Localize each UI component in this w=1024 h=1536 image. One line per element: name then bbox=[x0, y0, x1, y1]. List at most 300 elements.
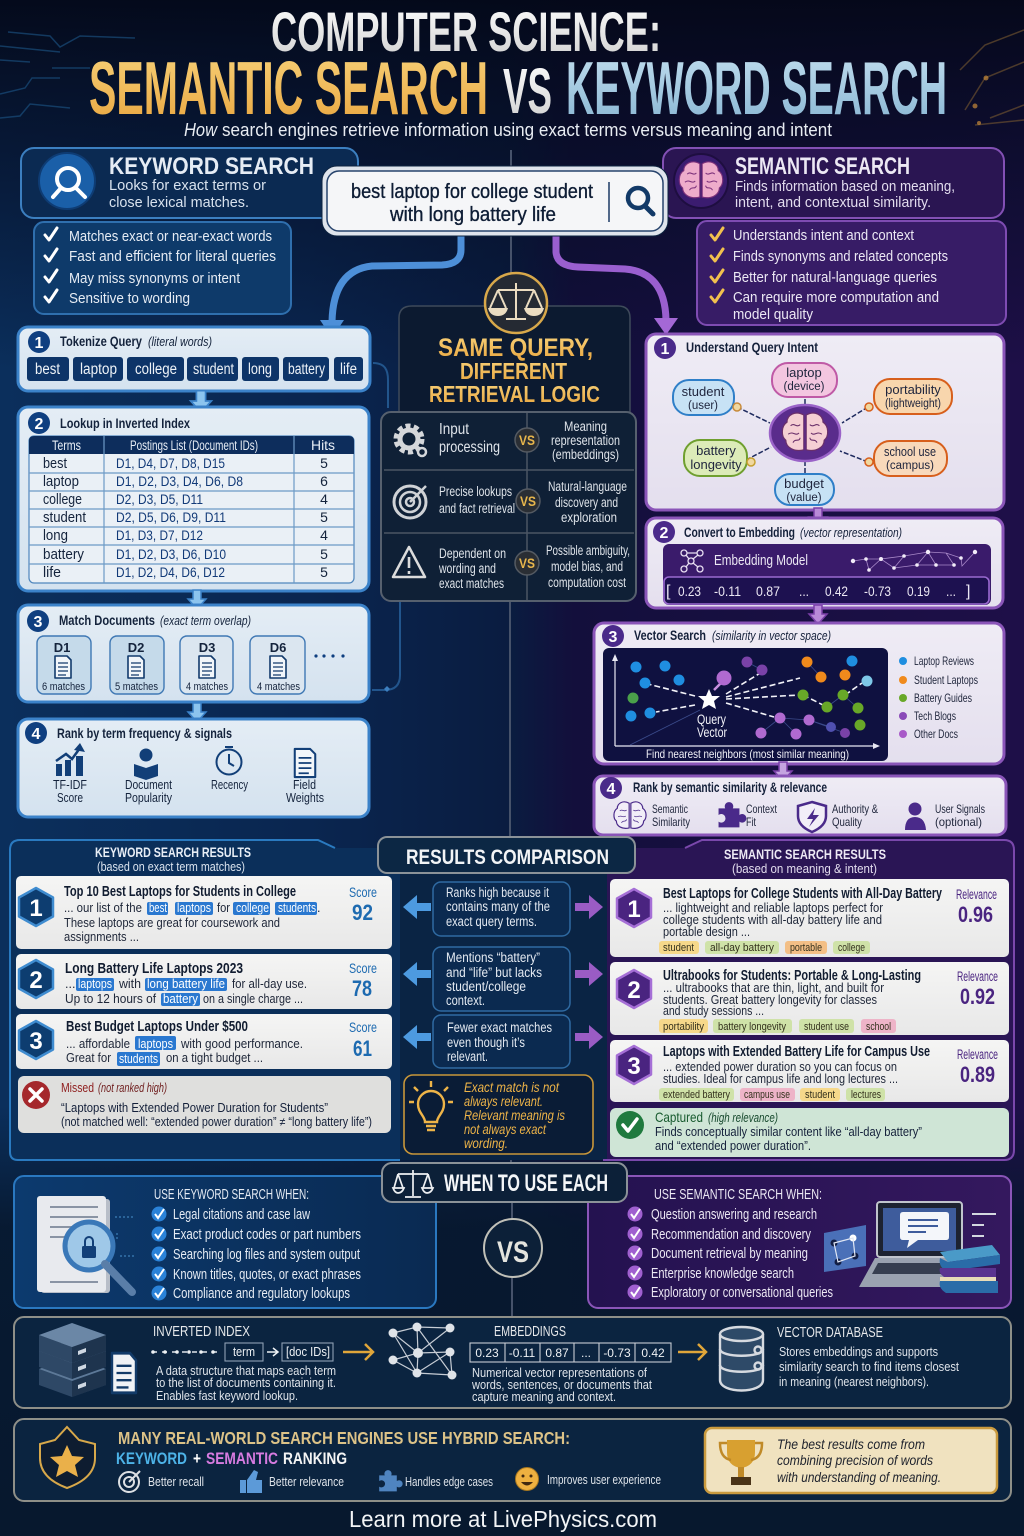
panel: concept definitions: Numerical vector representations of bbox=[472, 1366, 647, 1380]
embedding cells: 0.23 bbox=[475, 1346, 499, 1360]
result card 2: with bbox=[118, 977, 141, 991]
result card 3: on a tight budget ... bbox=[166, 1051, 263, 1065]
query star bbox=[698, 689, 720, 709]
panel: semantic search results: (based on meaning & intent) bbox=[732, 861, 877, 876]
panel: keyword features bbox=[34, 222, 291, 314]
panel: rank by semantic similarity: Semantic bbox=[652, 802, 688, 816]
panel: use keyword search when bbox=[14, 1176, 436, 1308]
subtitle: search engines retrieve information using exact terms versus meaning and intent bbox=[222, 120, 832, 140]
document cards: 4 matches bbox=[186, 681, 228, 693]
result card 2: laptops bbox=[78, 977, 112, 991]
semantic result card 3 bbox=[610, 1040, 1009, 1102]
panel: concept definitions: to the list of documents containing it. bbox=[156, 1376, 336, 1390]
panel: rank by semantic similarity: Quality bbox=[832, 815, 862, 829]
panel: rank by term frequency: TF-IDF bbox=[53, 778, 87, 792]
panel: rank by semantic similarity: Similarity bbox=[652, 815, 690, 829]
panel: semantic features: Understands intent and context bbox=[733, 227, 915, 244]
panel: keyword features: Fast and efficient for literal queries bbox=[69, 248, 276, 265]
index table: 5 bbox=[320, 455, 328, 471]
panel: rank by term frequency: Weights bbox=[286, 791, 324, 805]
panel: rank by semantic similarity bbox=[594, 776, 1006, 835]
query tokens: best bbox=[35, 361, 61, 378]
semantic result card 3: ... extended power duration so you can focus on bbox=[663, 1060, 897, 1074]
vector space plot: Vector bbox=[697, 725, 727, 740]
index table: battery bbox=[43, 547, 85, 563]
term to doc ids diagram: term bbox=[233, 1345, 255, 1359]
icon: document popularity bbox=[134, 748, 158, 780]
arrow bbox=[809, 605, 827, 624]
keyword use cases: Known titles, quotes, or exact phrases bbox=[173, 1266, 361, 1283]
index table: 4 bbox=[320, 491, 328, 507]
vs badge bbox=[484, 1219, 542, 1277]
arrow bbox=[678, 1344, 706, 1360]
panel: rank by term frequency: Rank by term frequency & signals bbox=[57, 725, 232, 741]
panel: comparison table: and fact retrieval bbox=[439, 501, 515, 516]
panel: concept definitions: similarity search to find items closest bbox=[779, 1359, 959, 1374]
embedding vector: ... bbox=[799, 583, 809, 599]
embedding vector: -0.73 bbox=[864, 583, 891, 599]
icon: vector database bbox=[720, 1327, 763, 1390]
embedding cells bbox=[470, 1343, 671, 1362]
keyword use cases: Searching log files and system output bbox=[173, 1246, 361, 1263]
panel: keyword search results: (based on exact term matches) bbox=[97, 859, 245, 874]
index table: 5 bbox=[320, 509, 328, 525]
callout: exact match: always relevant. bbox=[464, 1093, 543, 1109]
document cards: D1 bbox=[54, 640, 70, 655]
panel: hybrid search bbox=[14, 1419, 1011, 1532]
legend: Tech Blogs bbox=[914, 709, 956, 723]
index table: life bbox=[43, 565, 61, 581]
panel: concept definitions: EMBEDDINGS bbox=[494, 1324, 566, 1340]
panel: lookup in inverted index: Lookup in Inverted Index bbox=[60, 415, 190, 431]
comparison explanations: Mentions “battery” bbox=[446, 950, 540, 965]
icon: tf-idf chart bbox=[56, 743, 85, 776]
semantic result card 3: campus use bbox=[744, 1089, 790, 1101]
vector space plot: Find nearest neighbors (most similar meaning) bbox=[646, 747, 849, 761]
panel: keyword search header: KEYWORD SEARCH bbox=[109, 153, 314, 180]
index table: long bbox=[43, 528, 68, 544]
semantic result card 1: college students with all-day battery life and bbox=[663, 913, 882, 927]
concept bubbles: (campus) bbox=[886, 460, 934, 472]
missed result: (not matched well: “extended power duration” ≠ “long battery life”) bbox=[61, 1115, 372, 1129]
term to doc ids diagram bbox=[151, 1343, 333, 1361]
panel: convert to embedding bbox=[646, 518, 1003, 608]
result card 3: Best Budget Laptops Under $500 bbox=[66, 1019, 248, 1035]
vs badges: VS bbox=[519, 555, 535, 571]
concept bubbles: (value) bbox=[786, 492, 822, 504]
semantic result card 1: 0.96 bbox=[958, 902, 993, 927]
title: COMPUTER SCIENCE: bbox=[271, 0, 661, 63]
panel: use keyword search when: USE KEYWORD SEARCH WHEN: bbox=[154, 1187, 309, 1203]
concept bubbles bbox=[673, 363, 952, 505]
semantic use cases bbox=[628, 1206, 833, 1301]
result card 1: students bbox=[278, 901, 316, 915]
index table: Postings List (Document IDs) bbox=[130, 438, 258, 453]
panel: understand query intent: Understand Query Intent bbox=[686, 339, 818, 355]
panel: comparison table bbox=[381, 412, 636, 601]
result card 2: 78 bbox=[352, 976, 372, 1001]
query tokens bbox=[27, 357, 363, 381]
panel: lookup in inverted index bbox=[18, 407, 369, 591]
results comparison heading bbox=[378, 837, 635, 873]
panel: semantic search header bbox=[663, 148, 1004, 218]
result card 1: 92 bbox=[352, 900, 373, 925]
index table: 5 bbox=[320, 546, 328, 562]
arrow bbox=[343, 1344, 373, 1360]
semantic use cases: Exploratory or conversational queries bbox=[651, 1284, 833, 1301]
index table: D1, D2, D3, D6, D10 bbox=[116, 547, 226, 562]
vector space plot: Query bbox=[697, 712, 726, 727]
panel: rank by semantic similarity: User Signals bbox=[935, 802, 985, 816]
panel: understand query intent bbox=[646, 334, 1004, 510]
panel: rank by semantic similarity: Rank by semantic similarity & relevance bbox=[633, 779, 827, 795]
benefits row bbox=[119, 1468, 661, 1493]
icon: shield star bbox=[40, 1427, 95, 1488]
icon: server stack bbox=[39, 1323, 136, 1397]
concept bubbles: (user) bbox=[688, 400, 718, 412]
embedding vector: 0.87 bbox=[756, 583, 780, 599]
embedding model bar: Embedding Model bbox=[714, 553, 808, 569]
semantic result card 3: extended battery bbox=[663, 1089, 730, 1101]
panel: keyword features: Matches exact or near-exact words bbox=[69, 228, 272, 245]
benefits row: Better recall bbox=[148, 1474, 204, 1489]
panel: comparison table: processing bbox=[439, 439, 500, 456]
query tokens: battery bbox=[288, 361, 325, 378]
icon: neural network bbox=[388, 1322, 456, 1380]
panel: keyword search header: Looks for exact terms or bbox=[109, 177, 266, 194]
index table: 5 bbox=[320, 564, 328, 580]
semantic result card 3: studies. Ideal for campus life and long lectures ... bbox=[663, 1072, 898, 1086]
index table: student bbox=[43, 510, 86, 526]
panel: comparison table: wording and bbox=[438, 561, 496, 576]
icon: user bbox=[905, 802, 926, 830]
panel: match documents bbox=[18, 605, 369, 702]
icon: target bbox=[394, 486, 426, 518]
result card 1: laptops bbox=[177, 901, 211, 915]
subtitle: How bbox=[184, 120, 218, 140]
panel: comparison table: computation cost bbox=[548, 575, 626, 590]
comparison explanations: student/college bbox=[446, 979, 526, 994]
index table: best bbox=[43, 456, 67, 472]
result card 1: for bbox=[217, 901, 230, 915]
legend: Other Docs bbox=[914, 727, 958, 741]
panel: concept definitions: A data structure that maps each term bbox=[156, 1364, 336, 1378]
arrow bbox=[774, 762, 792, 781]
panel: hybrid search: MANY REAL-WORLD SEARCH ENGINES USE HYBRID SEARCH: bbox=[118, 1428, 570, 1448]
document cards: 5 matches bbox=[115, 681, 158, 693]
result card 3: Score bbox=[349, 1019, 377, 1035]
semantic use cases: Document retrieval by meaning bbox=[651, 1245, 808, 1262]
result card 3: 61 bbox=[353, 1036, 372, 1061]
illustration: laptop and books bbox=[824, 1202, 1000, 1293]
benefits row: Improves user experience bbox=[547, 1472, 661, 1487]
panel: concept definitions: Stores embeddings and supports bbox=[779, 1344, 938, 1359]
arrow bbox=[188, 590, 206, 609]
callout: exact match: wording. bbox=[464, 1135, 508, 1151]
panel: keyword search results: KEYWORD SEARCH RESULTS bbox=[95, 844, 251, 860]
icon: recency clock bbox=[216, 747, 242, 774]
semantic result card 3: Laptops with Extended Battery Life for Campus Use bbox=[663, 1044, 930, 1060]
icon: magnifier bbox=[39, 153, 95, 209]
panel: convert to embedding: 2 bbox=[660, 525, 669, 542]
legend: Laptop Reviews bbox=[914, 654, 974, 668]
semantic result card 2: Relevance bbox=[957, 969, 998, 984]
arrow bbox=[191, 391, 211, 412]
missed result: (not ranked high) bbox=[98, 1081, 167, 1095]
callout: exact match: Exact match is not bbox=[464, 1079, 560, 1095]
hybrid formula: + bbox=[193, 1450, 201, 1468]
index table: D2, D3, D5, D11 bbox=[116, 492, 203, 507]
panel: same query different retrieval logic bbox=[399, 273, 630, 412]
panel: tokenize query bbox=[18, 327, 370, 391]
panel: keyword features: Sensitive to wording bbox=[69, 290, 190, 307]
embedding cells: ... bbox=[581, 1346, 591, 1360]
panel: comparison table: Input bbox=[439, 421, 469, 438]
search box bbox=[322, 166, 668, 236]
panel: rank by semantic similarity: Context bbox=[746, 802, 777, 816]
embedding model bar bbox=[663, 544, 991, 605]
keyword use cases bbox=[152, 1206, 361, 1302]
panel: use semantic search when bbox=[588, 1176, 1011, 1308]
search box: with long battery life bbox=[389, 204, 556, 226]
arrow bbox=[188, 703, 206, 722]
result card 2: battery bbox=[163, 992, 199, 1006]
panel: comparison table: Dependent on bbox=[439, 546, 506, 561]
embedding vector: [ bbox=[666, 583, 671, 600]
semantic result card 1: all-day battery bbox=[710, 942, 774, 954]
when to use each heading: WHEN TO USE EACH bbox=[444, 1170, 608, 1197]
result card 3: students bbox=[119, 1052, 158, 1066]
panel: comparison table: Possible ambiguity, bbox=[546, 543, 630, 558]
icon: warning bbox=[393, 547, 425, 577]
semantic result card 2: student use bbox=[804, 1021, 849, 1033]
document cards: 4 matches bbox=[257, 681, 300, 693]
panel: tokenize query: (literal words) bbox=[148, 334, 212, 349]
query tokens: long bbox=[248, 361, 272, 378]
panel: semantic search header: SEMANTIC SEARCH bbox=[735, 153, 910, 180]
result card 2: on a single charge ... bbox=[203, 992, 303, 1006]
query tokens: college bbox=[135, 361, 177, 378]
arrow: query to semantic bbox=[556, 236, 678, 335]
result card 3: Great for bbox=[66, 1051, 111, 1065]
document cards: D3 bbox=[199, 640, 215, 655]
panel: semantic features: Can require more computation and bbox=[733, 289, 939, 306]
captured result: (high relevance) bbox=[708, 1111, 778, 1125]
hybrid formula bbox=[116, 1450, 347, 1468]
result card 2: 2 bbox=[29, 967, 43, 994]
vs badges bbox=[515, 428, 540, 575]
result card 2: for all-day use. bbox=[232, 977, 307, 991]
result card 2: Score bbox=[349, 960, 377, 976]
result card 1: Score bbox=[349, 884, 377, 900]
comparison explanations: Fewer exact matches bbox=[447, 1020, 552, 1035]
result card 1 bbox=[16, 876, 392, 949]
result card 1: college bbox=[236, 901, 269, 915]
semantic result card 1 bbox=[610, 879, 1009, 957]
result card 3 bbox=[16, 1014, 392, 1069]
panel: match documents: (exact term overlap) bbox=[160, 613, 251, 628]
panel: tokenize query: 1 bbox=[35, 335, 44, 352]
semantic result card 1: student bbox=[663, 942, 694, 954]
concept bubbles: battery bbox=[696, 443, 736, 458]
semantic result card 2: battery longevity bbox=[718, 1021, 786, 1033]
comparison explanations: Ranks high because it bbox=[446, 885, 549, 900]
semantic result card 2: school bbox=[866, 1021, 891, 1033]
missed result: “Laptops with Extended Power Duration for Students” bbox=[61, 1100, 328, 1115]
panel: semantic search results bbox=[603, 840, 1014, 1160]
semantic result card 2: ... ultrabooks that are thin, light, and built for bbox=[663, 981, 884, 995]
icon: light bulb bbox=[409, 1081, 453, 1130]
panel: concept definitions: Enables fast keyword lookup. bbox=[156, 1389, 298, 1403]
semantic result card 2: 2 bbox=[627, 977, 641, 1004]
comparison explanations: even though it’s bbox=[447, 1035, 525, 1050]
index table bbox=[29, 436, 354, 583]
panel: comparison table: Meaning bbox=[564, 419, 607, 434]
semantic result card 1: Relevance bbox=[956, 887, 997, 902]
index table: D1, D3, D7, D12 bbox=[116, 528, 203, 543]
concept bubbles: budget bbox=[784, 476, 824, 491]
panel: rank by semantic similarity: Authority & bbox=[832, 802, 878, 816]
query tokens: life bbox=[340, 361, 357, 378]
title: VS bbox=[503, 55, 552, 127]
legend: Battery Guides bbox=[914, 691, 972, 705]
query tokens: student bbox=[193, 361, 235, 378]
index table: D1, D2, D3, D4, D6, D8 bbox=[116, 474, 243, 489]
result card 1: Top 10 Best Laptops for Students in College bbox=[64, 884, 296, 900]
embedding cells: 0.87 bbox=[545, 1346, 569, 1360]
panel: semantic search header: intent, and contextual similarity. bbox=[735, 194, 931, 211]
panel: rank by term frequency: Popularity bbox=[125, 791, 173, 805]
panel: comparison table: representation bbox=[551, 433, 620, 448]
panel: concept definitions bbox=[14, 1317, 1011, 1408]
panel: lookup in inverted index: 2 bbox=[35, 416, 44, 433]
panel: same query different retrieval logic: RETRIEVAL LOGIC bbox=[429, 381, 600, 407]
result card 1: These laptops are great for coursework and bbox=[64, 916, 280, 930]
icon: field weights bbox=[295, 749, 315, 777]
panel: comparison table: (embeddings) bbox=[552, 447, 619, 462]
result card 2: Long Battery Life Laptops 2023 bbox=[65, 961, 243, 977]
panel: match documents: Match Documents bbox=[59, 612, 155, 628]
arrow: query to keyword bbox=[320, 236, 461, 338]
panel: rank by semantic similarity: 4 bbox=[607, 781, 616, 798]
callout: exact match bbox=[404, 1075, 593, 1154]
panel: comparison table: model bias, and bbox=[551, 559, 623, 574]
panel: same query different retrieval logic: DIFFERENT bbox=[460, 358, 567, 384]
panel: comparison table: discovery and bbox=[555, 495, 618, 510]
result card 3: laptops bbox=[138, 1037, 173, 1051]
index table: D2, D5, D6, D9, D11 bbox=[116, 510, 226, 525]
illustration: document and magnifier bbox=[37, 1196, 135, 1293]
result card 1: assignments ... bbox=[64, 930, 139, 944]
result card 1: . bbox=[317, 901, 320, 915]
panel: same query different retrieval logic: SAME QUERY, bbox=[438, 334, 593, 362]
panel: vector search: 3 bbox=[609, 629, 618, 646]
embedding cells: -0.11 bbox=[509, 1346, 536, 1360]
panel: semantic features: Finds synonyms and related concepts bbox=[733, 248, 948, 265]
vs badges: VS bbox=[519, 432, 535, 448]
semantic result card 2: Ultrabooks for Students: Portable & Long-Lasting bbox=[663, 968, 921, 984]
result card 1: best bbox=[149, 901, 167, 915]
panel: keyword features: May miss synonyms or intent bbox=[69, 270, 241, 287]
callout: best results: with understanding of meaning. bbox=[777, 1469, 941, 1485]
embedding cells: -0.73 bbox=[603, 1346, 631, 1360]
captured result bbox=[610, 1108, 1009, 1157]
panel: concept definitions: in meaning (nearest neighbors). bbox=[779, 1374, 929, 1389]
semantic use cases: Question answering and research bbox=[651, 1206, 817, 1223]
result card 3: ... affordable bbox=[66, 1037, 130, 1051]
semantic result card 1: 1 bbox=[627, 896, 641, 923]
concept bubbles: (device) bbox=[784, 381, 825, 393]
panel: vector search: (similarity in vector space) bbox=[712, 629, 831, 643]
panel: comparison table: Natural-language bbox=[548, 479, 627, 494]
panel: keyword search results bbox=[10, 840, 607, 1160]
vs badges: VS bbox=[520, 493, 536, 509]
panel: rank by term frequency bbox=[18, 719, 369, 817]
missed result bbox=[18, 1076, 391, 1133]
panel: rank by term frequency: 4 bbox=[32, 726, 41, 743]
index table: D1, D2, D4, D6, D12 bbox=[116, 565, 225, 580]
semantic result card 2: 0.92 bbox=[960, 984, 995, 1009]
icon: scales bbox=[393, 1170, 433, 1197]
concept bubbles: laptop bbox=[786, 365, 822, 380]
comparison explanations: relevant. bbox=[447, 1049, 488, 1064]
callout: best results: combining precision of words bbox=[777, 1452, 933, 1468]
document cards: D2 bbox=[128, 640, 144, 655]
hybrid formula: KEYWORD bbox=[116, 1450, 187, 1468]
panel: rank by term frequency: Score bbox=[57, 791, 83, 805]
when to use each heading bbox=[382, 1163, 627, 1202]
panel: concept definitions: VECTOR DATABASE bbox=[777, 1325, 883, 1341]
semantic result card 3: lectures bbox=[851, 1089, 881, 1101]
embedding vector: 0.23 bbox=[678, 583, 701, 599]
icon: brain bbox=[674, 154, 728, 208]
keyword use cases: Compliance and regulatory lookups bbox=[173, 1285, 350, 1302]
index table: 4 bbox=[320, 527, 328, 543]
semantic result card 3: Relevance bbox=[957, 1047, 998, 1062]
concept bubbles: student bbox=[682, 384, 725, 399]
result card 2: ... bbox=[65, 977, 75, 991]
index table: Hits bbox=[311, 438, 335, 453]
panel: concept definitions: words, sentences, or documents that bbox=[471, 1378, 652, 1392]
comparison explanations: exact query terms. bbox=[446, 914, 537, 929]
panel: concept definitions: INVERTED INDEX bbox=[153, 1324, 250, 1340]
semantic result card 2 bbox=[610, 962, 1009, 1035]
title: SEMANTIC SEARCH bbox=[89, 46, 488, 130]
document cards: 6 matches bbox=[42, 681, 85, 693]
panel: rank by term frequency: Field bbox=[293, 778, 316, 792]
legend: Student Laptops bbox=[914, 673, 978, 687]
term to doc ids diagram: [doc IDs] bbox=[286, 1345, 330, 1359]
result card 3: with good performance. bbox=[180, 1037, 303, 1051]
result card 3: 3 bbox=[29, 1028, 43, 1055]
callout: exact match: Relevant meaning is bbox=[464, 1107, 565, 1123]
panel: semantic features bbox=[697, 221, 1006, 325]
semantic result card 2: students. Great battery longevity for classes bbox=[663, 993, 877, 1007]
panel: vector search: Vector Search bbox=[634, 627, 706, 643]
embedding vector: ] bbox=[966, 583, 970, 600]
keyword use cases: Legal citations and case law bbox=[173, 1206, 310, 1223]
result card 1: 1 bbox=[29, 895, 43, 922]
semantic result card 2: and study sessions ... bbox=[663, 1004, 764, 1018]
semantic use cases: Recommendation and discovery bbox=[651, 1226, 811, 1243]
result card 2: Up to 12 hours of bbox=[65, 992, 156, 1006]
panel: semantic features: Better for natural-language queries bbox=[733, 269, 937, 286]
icon: gears bbox=[396, 426, 426, 456]
index table: 6 bbox=[320, 473, 328, 489]
results comparison heading: RESULTS COMPARISON bbox=[406, 846, 609, 869]
icon: search bbox=[628, 188, 653, 214]
semantic result card 2: portability bbox=[663, 1021, 704, 1033]
